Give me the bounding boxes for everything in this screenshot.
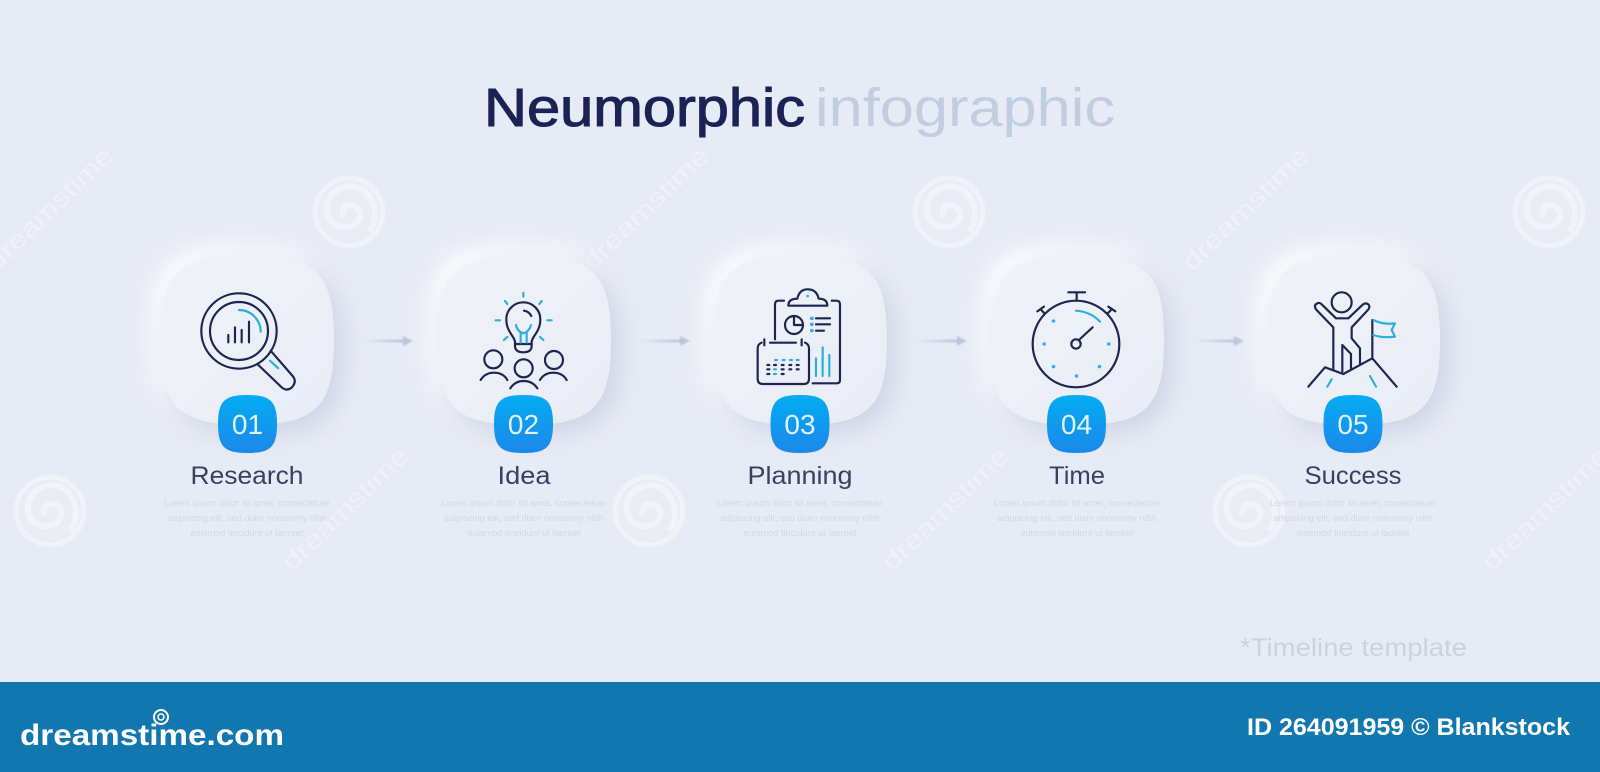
body text 3	[717, 498, 883, 539]
step 4: time	[982, 247, 1173, 539]
title: Neumorphic	[484, 78, 805, 138]
title: infographic	[815, 78, 1115, 138]
step 2: idea	[429, 247, 620, 539]
badge 03: 03	[784, 409, 816, 440]
body text 2: Lorem ipsum dolor sit amet, consectetuer	[441, 498, 607, 509]
body text 3: euismod tincidunt ut laoreet	[744, 528, 857, 539]
arrow 4	[1193, 336, 1244, 346]
step 3: planning	[705, 247, 896, 539]
body text 4: euismod tincidunt ut laoreet	[1020, 528, 1134, 539]
body text 2: adipiscing elit, sed diam nonummy nibh	[444, 513, 604, 524]
watermark: spirals and diagonal text: dreamstime	[1477, 442, 1600, 576]
watermark: spirals and diagonal text: dreamstime	[277, 442, 415, 576]
body text 2	[441, 498, 607, 539]
body text 4: adipiscing elit, sed diam nonummy nibh	[997, 513, 1157, 524]
arrow 2	[639, 336, 690, 346]
badge 02	[494, 395, 553, 453]
label: research: Research	[190, 462, 304, 490]
arrow 3	[916, 336, 967, 346]
body text 1: euismod tincidunt ut laoreet	[190, 528, 304, 539]
card 5	[1258, 247, 1449, 434]
watermark: spirals and diagonal text	[0, 142, 1600, 576]
badge 01	[218, 395, 277, 453]
watermark: spirals and diagonal text: dreamstime	[877, 442, 1015, 576]
body text 5: euismod tincidunt ut laoreet	[1296, 528, 1410, 539]
arrow 1	[362, 336, 413, 346]
badge 02: 02	[508, 409, 539, 440]
step 5: success	[1258, 247, 1449, 539]
logo: dreamstime.com: dreamstime.com	[20, 719, 284, 752]
body text 1: Lorem ipsum dolor sit amet, consectetuer	[164, 498, 330, 509]
body text 4	[994, 498, 1160, 539]
body text 1: adipiscing elit, sed diam nonummy nibh	[167, 513, 327, 524]
badge 03	[770, 395, 830, 453]
card 3	[705, 247, 896, 434]
icon: clipboard and calendar	[758, 289, 840, 384]
badge 04	[1047, 395, 1106, 453]
badge 05	[1324, 395, 1382, 453]
step 1: research	[152, 247, 343, 539]
card 4	[982, 247, 1173, 434]
badge 05: 05	[1337, 409, 1369, 440]
image id and credit: ID 264091959 © Blankstock	[1247, 714, 1571, 741]
label: idea: Idea	[498, 462, 551, 490]
icon: person on mountain with flag	[1308, 292, 1397, 387]
card 2	[429, 247, 620, 434]
label: success: Success	[1304, 462, 1402, 490]
body text 3: Lorem ipsum dolor sit amet, consectetuer	[717, 498, 883, 509]
icon: stopwatch	[1033, 292, 1119, 387]
watermark: spirals and diagonal text: dreamstime	[577, 142, 715, 276]
icon: magnifying glass with chart	[201, 293, 295, 390]
body text 5	[1270, 498, 1436, 539]
label: planning: Planning	[748, 462, 852, 490]
badge 04: 04	[1061, 409, 1092, 440]
body text 4: Lorem ipsum dolor sit amet, consectetuer	[994, 498, 1160, 509]
footnote: timeline template: *Timeline template	[1240, 634, 1467, 662]
footer banner	[0, 682, 1600, 772]
body text 2: euismod tincidunt ut laoreet	[468, 528, 581, 539]
label: time: Time	[1049, 462, 1105, 490]
watermark: spirals and diagonal text: dreamstime	[1177, 142, 1315, 276]
body text 5: Lorem ipsum dolor sit amet, consectetuer	[1270, 498, 1436, 509]
icon: light bulb and team	[481, 293, 567, 388]
card 1	[152, 247, 343, 434]
badge 01: 01	[232, 409, 263, 440]
body text 3: adipiscing elit, sed diam nonummy nibh	[720, 513, 880, 524]
title	[484, 78, 1115, 138]
body text 1	[164, 498, 330, 539]
body text 5: adipiscing elit, sed diam nonummy nibh	[1273, 513, 1433, 524]
